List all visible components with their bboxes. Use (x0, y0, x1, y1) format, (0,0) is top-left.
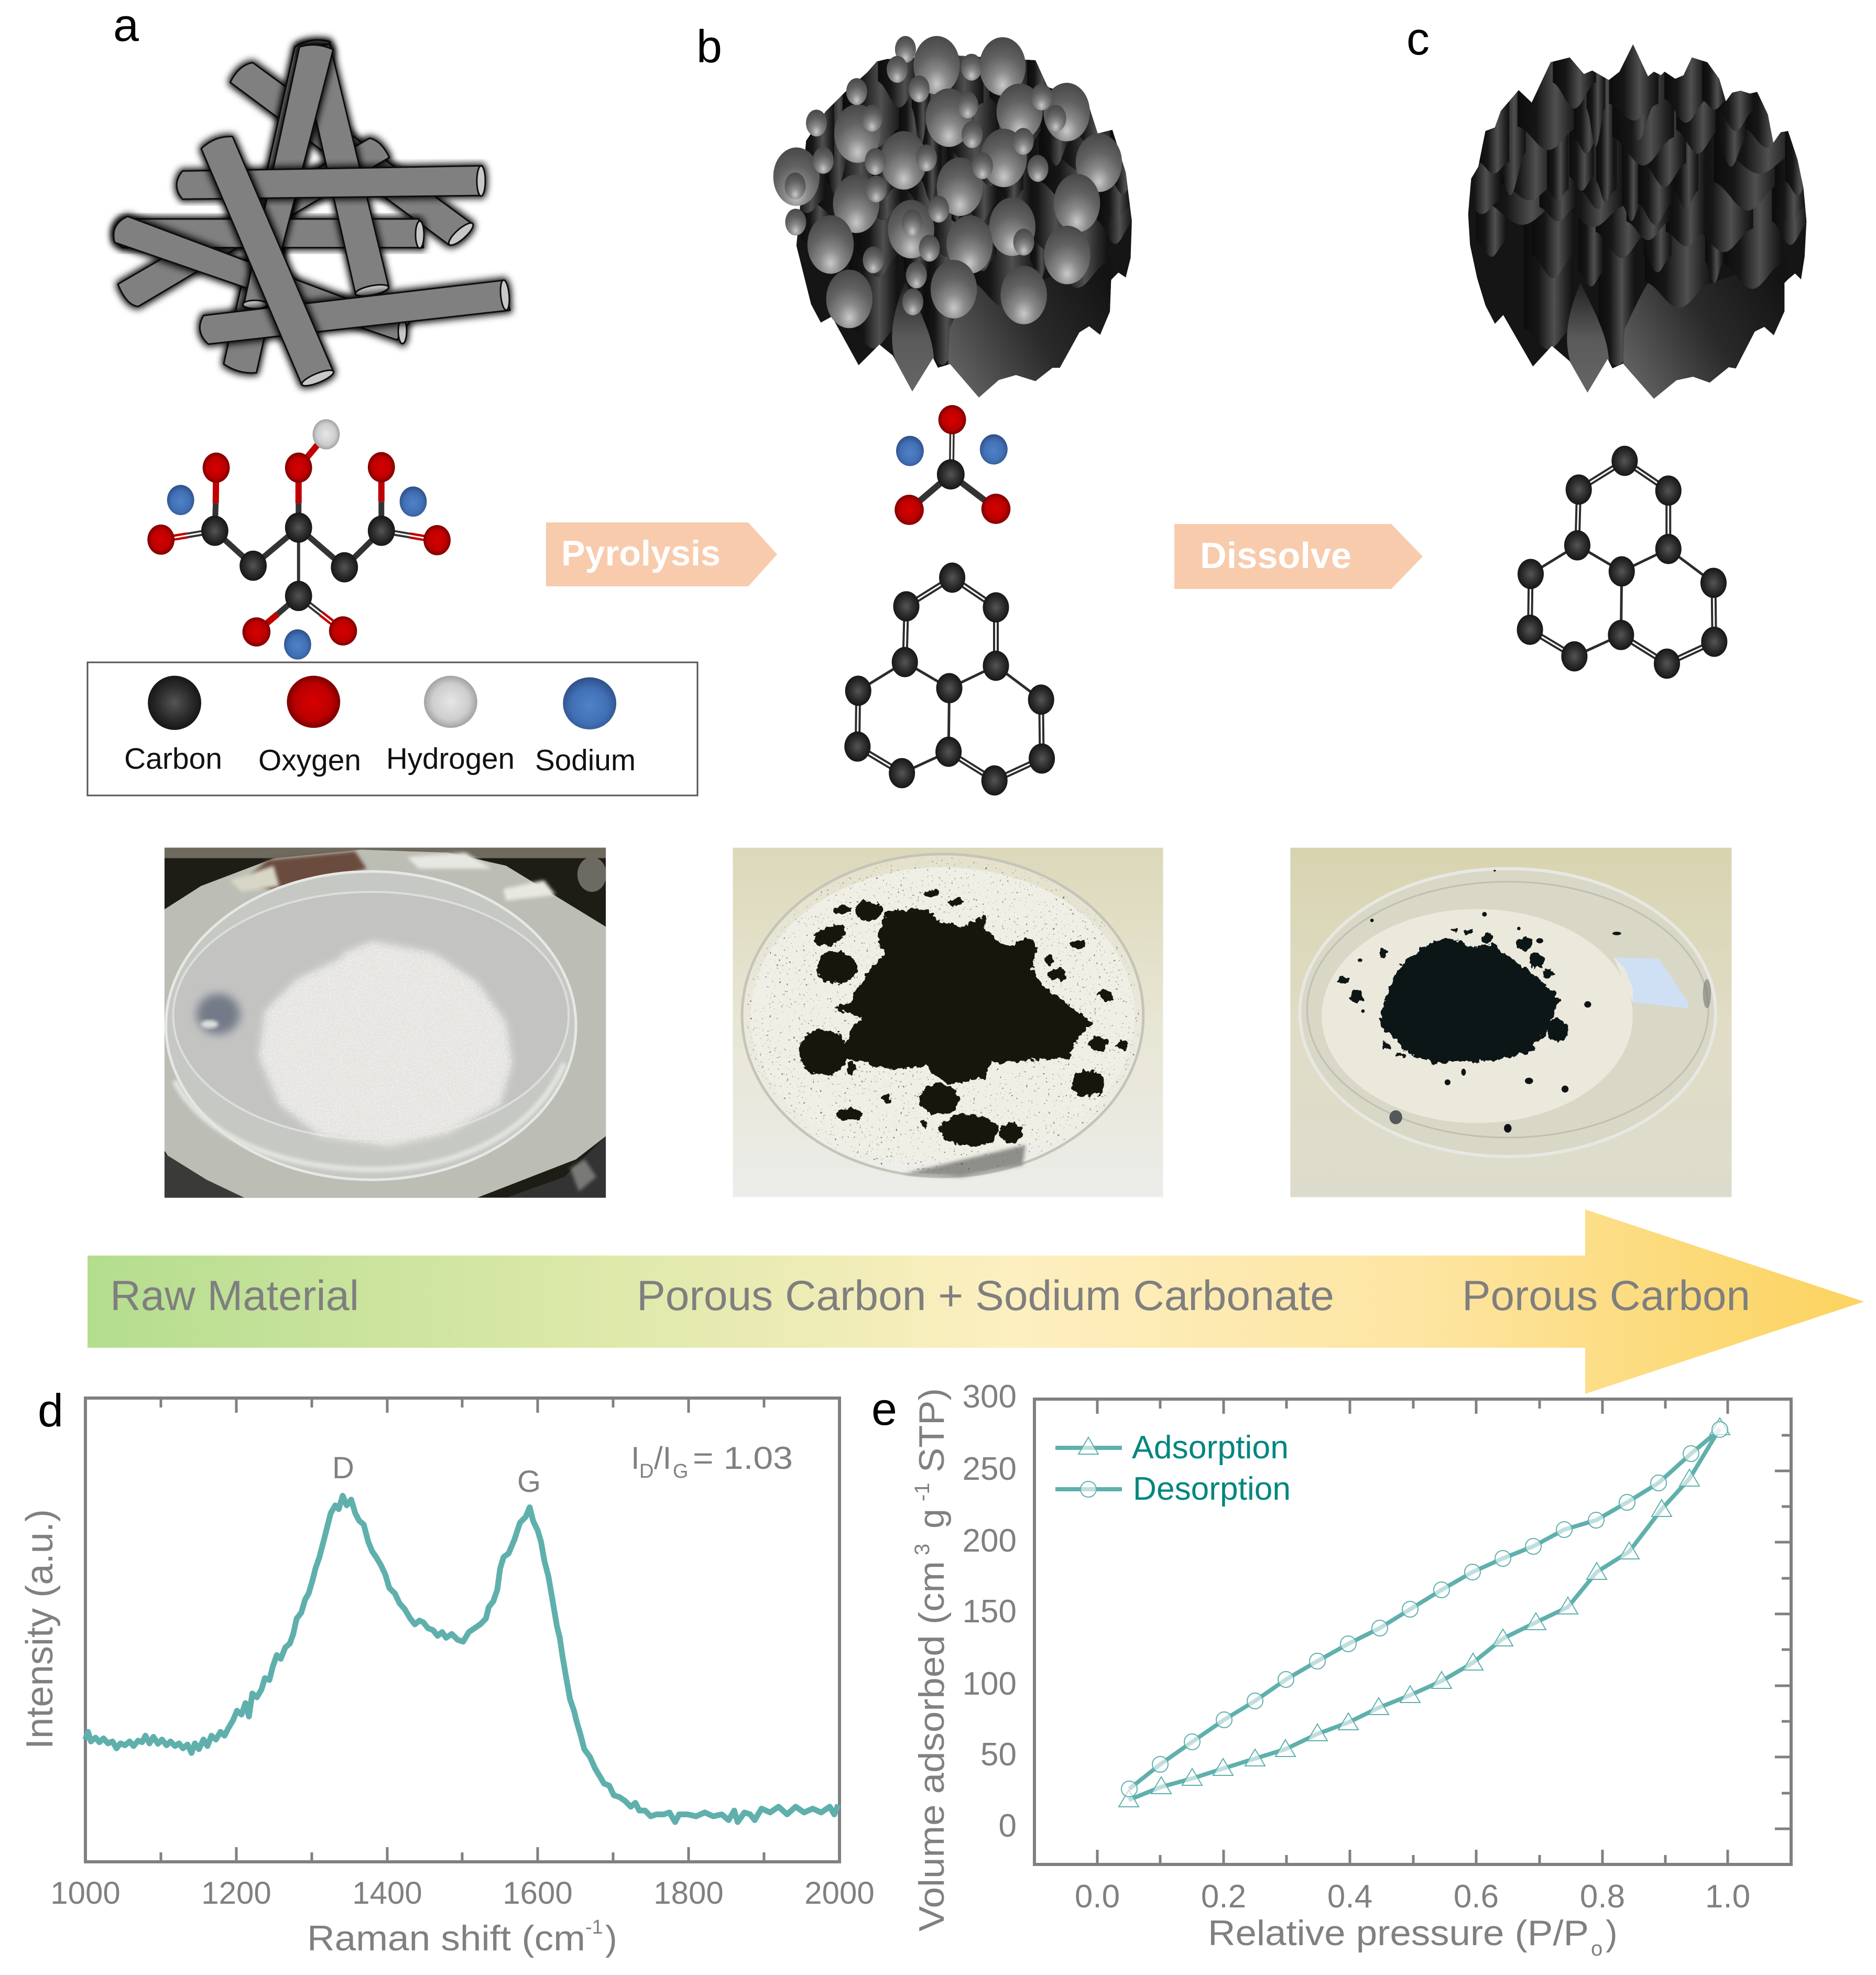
chart: Raman spectrum: Intensity (a.u.) (19, 1509, 61, 1749)
chart: Raman spectrum: /I (654, 1441, 671, 1476)
chart: Raman spectrum: G (517, 1465, 541, 1499)
panel label a: a (113, 0, 139, 51)
chart: nitrogen isotherm: STP) (912, 1388, 952, 1472)
chart: nitrogen isotherm: 200 (963, 1523, 1017, 1559)
chart: nitrogen isotherm: 0.0 (1075, 1879, 1120, 1915)
molecule: carbon rings (b) (844, 562, 1055, 795)
chart: nitrogen isotherm: -1 (911, 1482, 934, 1501)
chart: nitrogen isotherm (911, 1379, 1791, 1960)
chart: Raman spectrum: = 1.03 (693, 1441, 793, 1476)
chart: nitrogen isotherm: g (912, 1509, 952, 1529)
chart: Raman spectrum: 1600 (503, 1875, 573, 1911)
panel label e: e (871, 1383, 897, 1435)
chart: nitrogen isotherm: 0.8 (1580, 1879, 1625, 1915)
chart: nitrogen isotherm: 0.2 (1201, 1879, 1246, 1915)
legend: atom types: Hydrogen (386, 742, 515, 776)
panel label d: d (38, 1384, 63, 1436)
gradient process arrow (88, 1209, 1864, 1394)
chart: Raman spectrum (19, 1398, 875, 1958)
chart: nitrogen isotherm: 0 (999, 1808, 1017, 1844)
chart: Raman spectrum: 1400 (352, 1875, 422, 1911)
chart: Raman spectrum: G (673, 1460, 689, 1482)
molecule: sodium citrate (147, 419, 451, 660)
chart: nitrogen isotherm: 100 (963, 1666, 1017, 1702)
arrow: pyrolysis: Pyrolysis (561, 533, 721, 573)
chart: nitrogen isotherm: ) (1606, 1913, 1618, 1953)
chart legend (1055, 1430, 1291, 1507)
chart: nitrogen isotherm: 50 (980, 1737, 1017, 1773)
chart legend: Adsorption (1132, 1430, 1289, 1466)
arrow: dissolve (1174, 524, 1423, 589)
chart: nitrogen isotherm: 0.6 (1454, 1879, 1499, 1915)
chart legend: Desorption (1133, 1471, 1291, 1507)
chart: Raman spectrum: I (631, 1441, 640, 1476)
chart: Raman spectrum: 1200 (201, 1875, 271, 1911)
chart: Raman spectrum: D (332, 1451, 354, 1485)
legend: atom types: Oxygen (258, 744, 361, 777)
panel label b: b (696, 20, 722, 72)
gradient process arrow: Raw Material (110, 1272, 359, 1319)
illustration: tangled precursor rods (114, 40, 510, 389)
chart: Raman spectrum: 1000 (50, 1875, 121, 1911)
chart: Raman spectrum: 2000 (804, 1875, 875, 1911)
chart: Raman spectrum: ) (605, 1918, 617, 1958)
chart: Raman spectrum: Raman shift (cm (307, 1918, 585, 1958)
legend: atom types (88, 662, 697, 795)
panel label c: c (1406, 13, 1430, 64)
photo: porous carbon and sodium carbonate in dish (733, 848, 1163, 1197)
gradient process arrow: Porous Carbon + Sodium Carbonate (637, 1272, 1334, 1319)
photo: porous carbon in dish (1290, 848, 1732, 1197)
chart: nitrogen isotherm: Relative pressure (P/P (1208, 1913, 1589, 1953)
chart: nitrogen isotherm: Volume adsorbed (cm (912, 1561, 952, 1932)
legend: atom types: Sodium (535, 744, 636, 777)
chart: nitrogen isotherm: 1.0 (1705, 1879, 1750, 1915)
chart: nitrogen isotherm: 3 (911, 1544, 934, 1555)
chart: Raman spectrum: D (639, 1460, 653, 1482)
chart: nitrogen isotherm: o (1591, 1937, 1602, 1960)
molecule: sodium carbonate (895, 405, 1010, 525)
chart: nitrogen isotherm: 300 (963, 1379, 1017, 1415)
gradient process arrow: Porous Carbon (1462, 1272, 1750, 1319)
illustration: porous carbon (c) (1468, 45, 1807, 399)
chart: nitrogen isotherm: 250 (963, 1451, 1017, 1487)
arrow: pyrolysis (546, 522, 777, 586)
molecule: carbon rings (c) (1517, 446, 1727, 679)
illustration: porous carbon with spheres (b) (773, 36, 1132, 397)
chart: nitrogen isotherm: 150 (963, 1594, 1017, 1630)
legend: atom types: Carbon (124, 742, 222, 776)
arrow: dissolve: Dissolve (1200, 535, 1351, 576)
photo: raw material in dish (165, 848, 606, 1198)
chart: nitrogen isotherm: 0.4 (1327, 1879, 1372, 1915)
chart: Raman spectrum: -1 (585, 1916, 603, 1938)
chart: Raman spectrum: 1800 (653, 1875, 724, 1911)
